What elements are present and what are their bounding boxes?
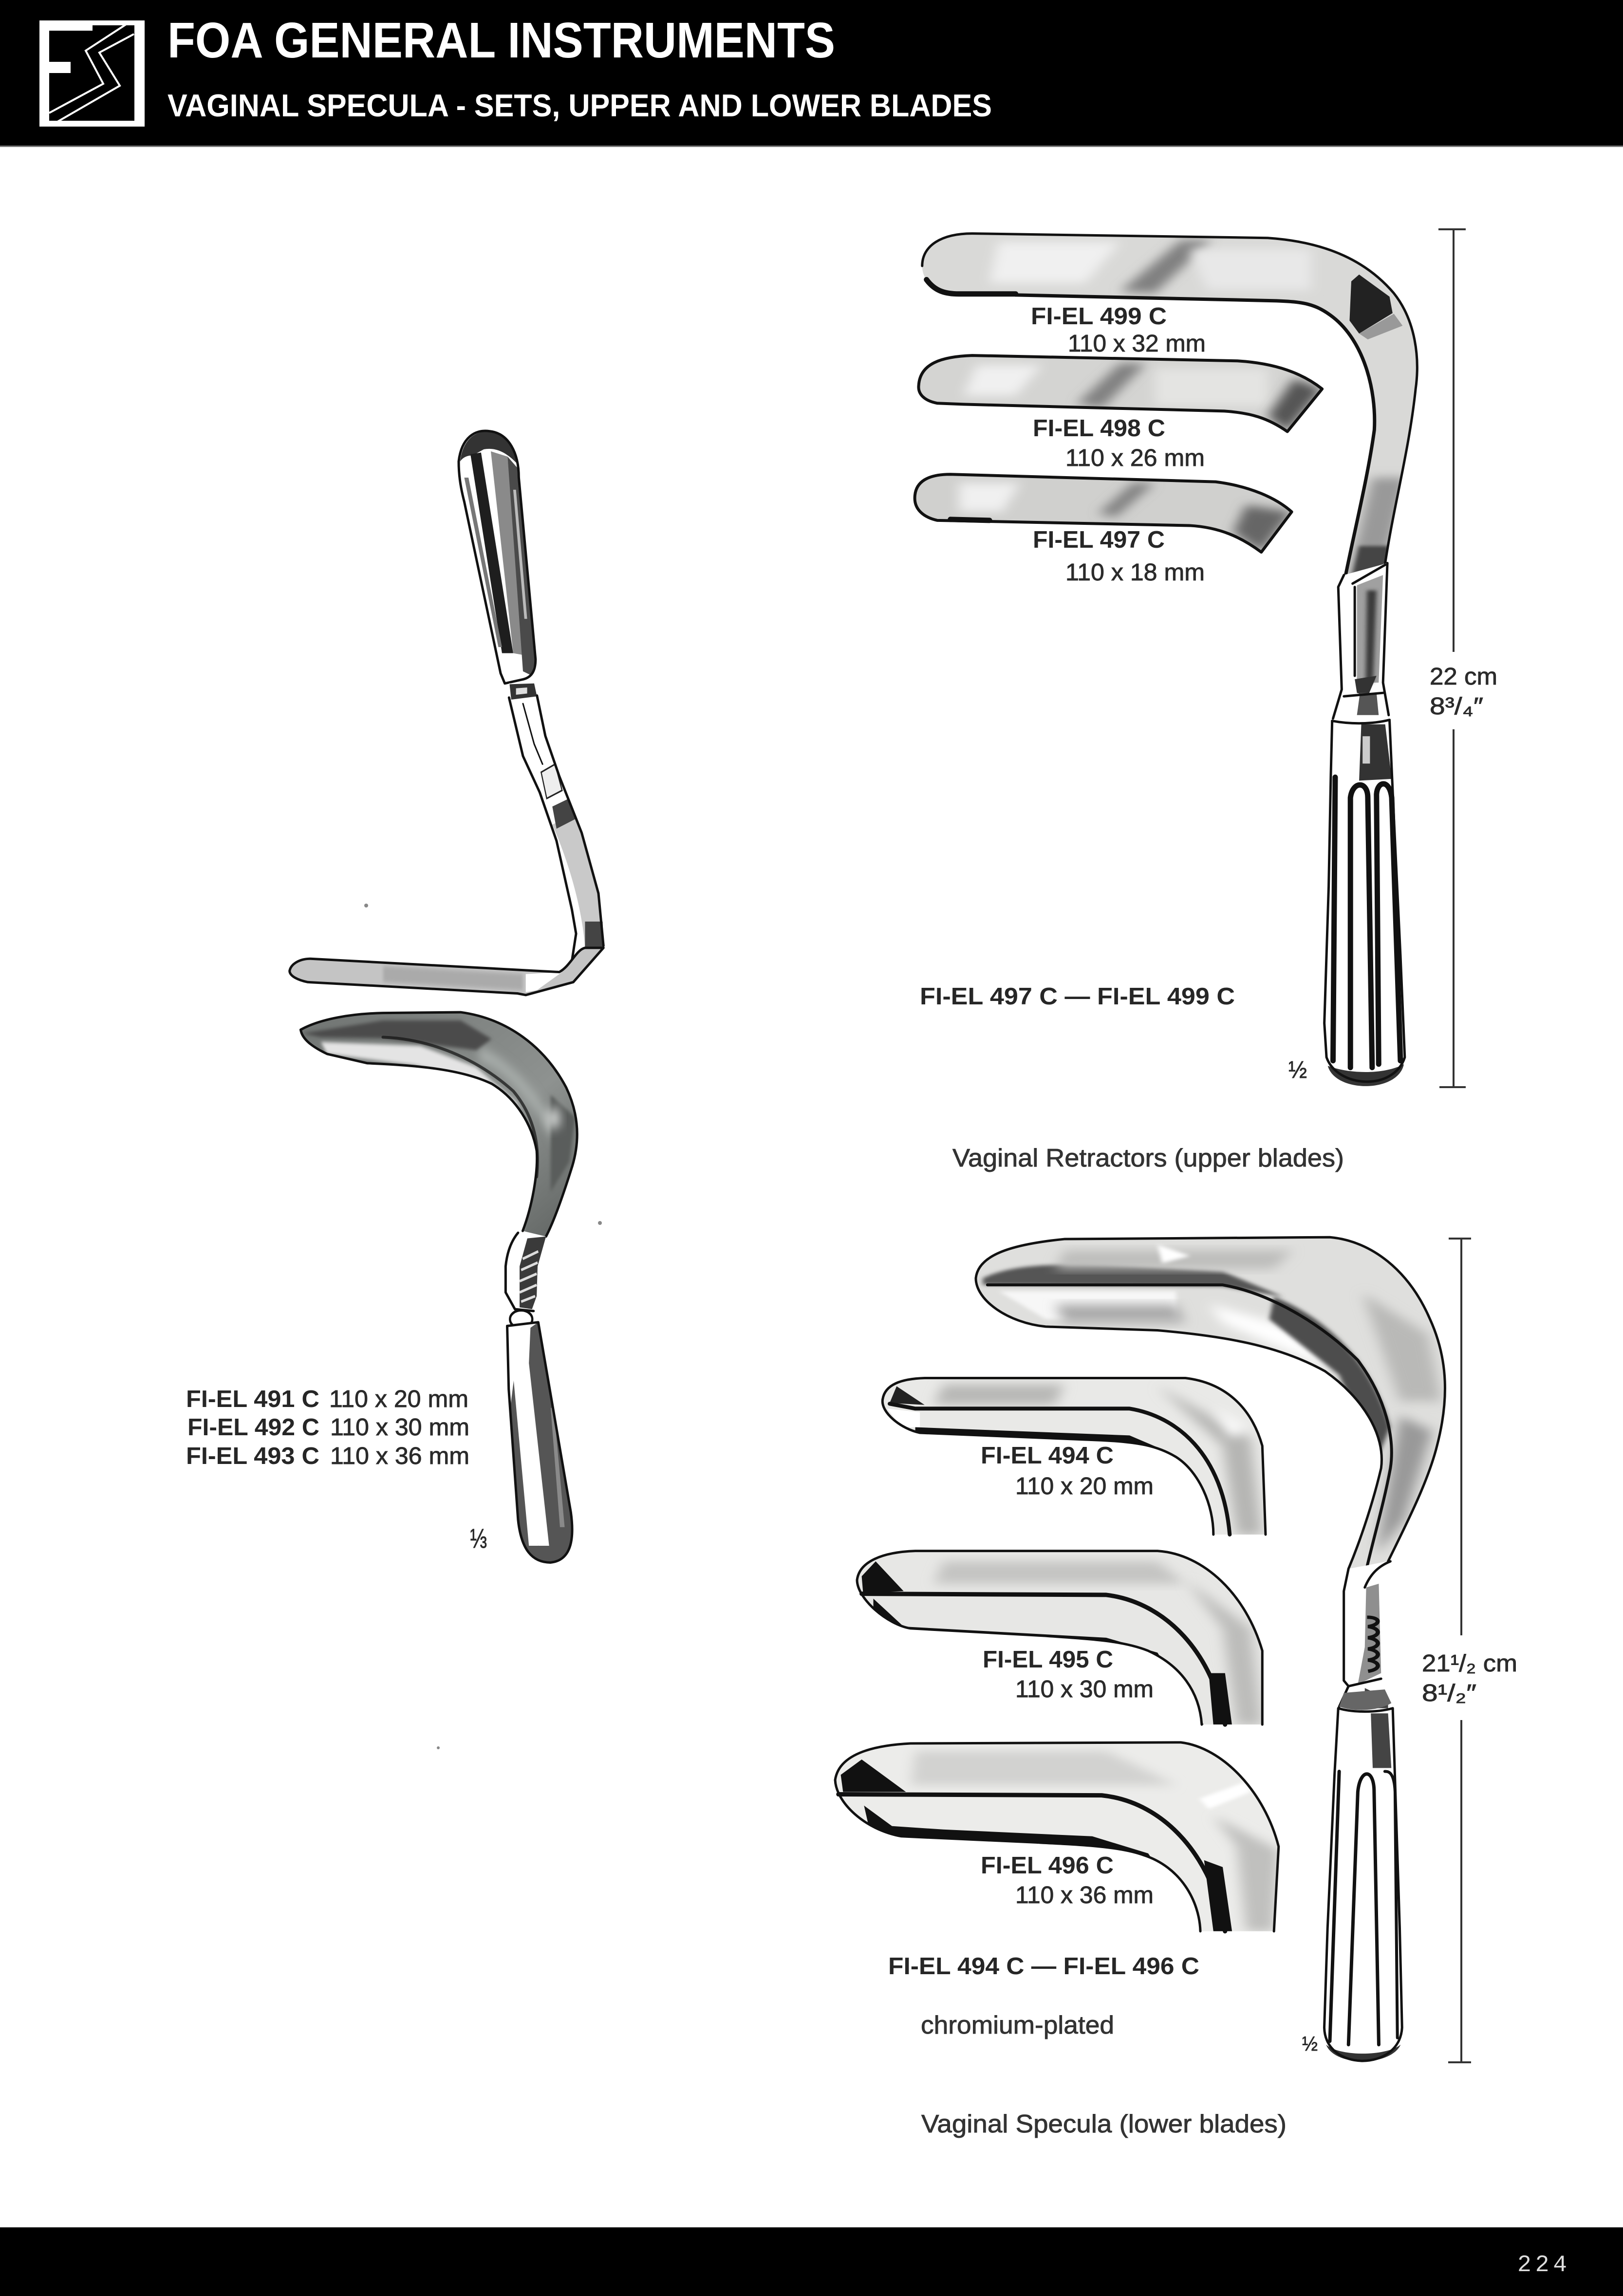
- header band: [0, 0, 1623, 147]
- dimension line: 22 cm: [1438, 229, 1466, 1087]
- page number: 224: [1517, 2252, 1567, 2278]
- label: FI-EL 496 C: FI-EL 496 C: [981, 1852, 1114, 1879]
- retractor shank: [1333, 563, 1389, 719]
- specks: [364, 904, 602, 1749]
- blade FI-EL 496 C: [831, 1741, 1283, 1932]
- label: 110 x 30 mm: 110 x 30 mm: [330, 1414, 469, 1441]
- logo: [39, 20, 145, 127]
- retractor shank: [509, 684, 603, 970]
- scale: one half: ½: [1302, 2032, 1318, 2055]
- length label: 21 1/2 cm: 21¹/₂ cm: [1422, 1650, 1517, 1677]
- scale: one half: ½: [1288, 1057, 1307, 1083]
- instrument: lower speculum with blades 494-496: [852, 1234, 1455, 1727]
- retractor handle: [1325, 720, 1405, 1086]
- speculum handle: [1325, 1689, 1402, 2061]
- label: FI-EL 497 C: FI-EL 497 C: [1033, 527, 1165, 553]
- blade FI-EL 497 C: [911, 473, 1298, 555]
- length label: 8 3/4 inch: 8³/₄″: [1430, 693, 1483, 720]
- label: FI-EL 493 C: FI-EL 493 C: [186, 1443, 319, 1469]
- range label: FI-EL 497 C - FI-EL 499 C: FI-EL 497 C — FI-EL 499 C: [920, 983, 1235, 1010]
- instrument: left speculum (lower blade): [296, 1005, 585, 1562]
- caption: Vaginal Specula (lower blades): Vaginal Specula (lower blades): [921, 2110, 1287, 2138]
- speculum blade: [296, 1005, 585, 1244]
- label: FI-EL 494 C: FI-EL 494 C: [981, 1443, 1114, 1469]
- label: 110 x 20 mm: 110 x 20 mm: [1015, 1473, 1154, 1500]
- label: FI-EL 495 C: FI-EL 495 C: [983, 1647, 1113, 1673]
- lower speculum blade FI-EL 496 C and handle: [831, 1689, 1402, 2061]
- label: 110 x 32 mm: 110 x 32 mm: [1068, 331, 1206, 357]
- label: 110 x 30 mm: 110 x 30 mm: [1015, 1676, 1154, 1703]
- blade FI-EL 498 C: [915, 353, 1329, 435]
- retractor blade: [290, 948, 603, 995]
- label: 110 x 26 mm: 110 x 26 mm: [1065, 445, 1205, 471]
- label: 110 x 36 mm: 110 x 36 mm: [1015, 1882, 1154, 1908]
- subtitle: VAGINAL SPECULA - SETS, UPPER AND LOWER BLADES: [168, 88, 992, 123]
- scale: one third: ⅓: [470, 1523, 487, 1554]
- range label: FI-EL 494 C - FI-EL 496 C: FI-EL 494 C — FI-EL 496 C: [888, 1953, 1199, 1980]
- blade FI-EL 494 C: [878, 1375, 1269, 1539]
- length label: 22 cm: 22 cm: [1430, 664, 1497, 690]
- label: 110 x 20 mm: 110 x 20 mm: [329, 1386, 468, 1412]
- title: FOA GENERAL INSTRUMENTS: [168, 12, 835, 68]
- large speculum blade: [971, 1234, 1455, 1576]
- caption: Vaginal Retractors (upper blades): Vaginal Retractors (upper blades): [952, 1144, 1344, 1172]
- dimension line: 21 1/2 cm: [1448, 1239, 1471, 2062]
- instrument: upper retractor with blades 497-499: [911, 228, 1424, 719]
- serrated neck: [1339, 1561, 1390, 1710]
- label: 110 x 18 mm: 110 x 18 mm: [1065, 559, 1205, 586]
- instrument: left retractor (upper blade): [290, 431, 603, 995]
- label: FI-EL 499 C: FI-EL 499 C: [1031, 303, 1167, 330]
- label: 110 x 36 mm: 110 x 36 mm: [330, 1443, 469, 1469]
- label: FI-EL 492 C: FI-EL 492 C: [187, 1414, 319, 1441]
- blade FI-EL 499 C: [915, 228, 1424, 587]
- label: FI-EL 491 C: FI-EL 491 C: [186, 1386, 319, 1412]
- length label: 8 1/2 inch: 8¹/₂″: [1422, 1680, 1476, 1706]
- note: chromium-plated: chromium-plated: [921, 2011, 1114, 2039]
- footer band: [0, 2227, 1623, 2296]
- retractor handle: [459, 431, 536, 684]
- speculum handle: [507, 1310, 572, 1562]
- label: FI-EL 498 C: FI-EL 498 C: [1033, 415, 1165, 442]
- speculum serrated neck: [505, 1233, 546, 1311]
- blade FI-EL 495 C: [852, 1548, 1267, 1727]
